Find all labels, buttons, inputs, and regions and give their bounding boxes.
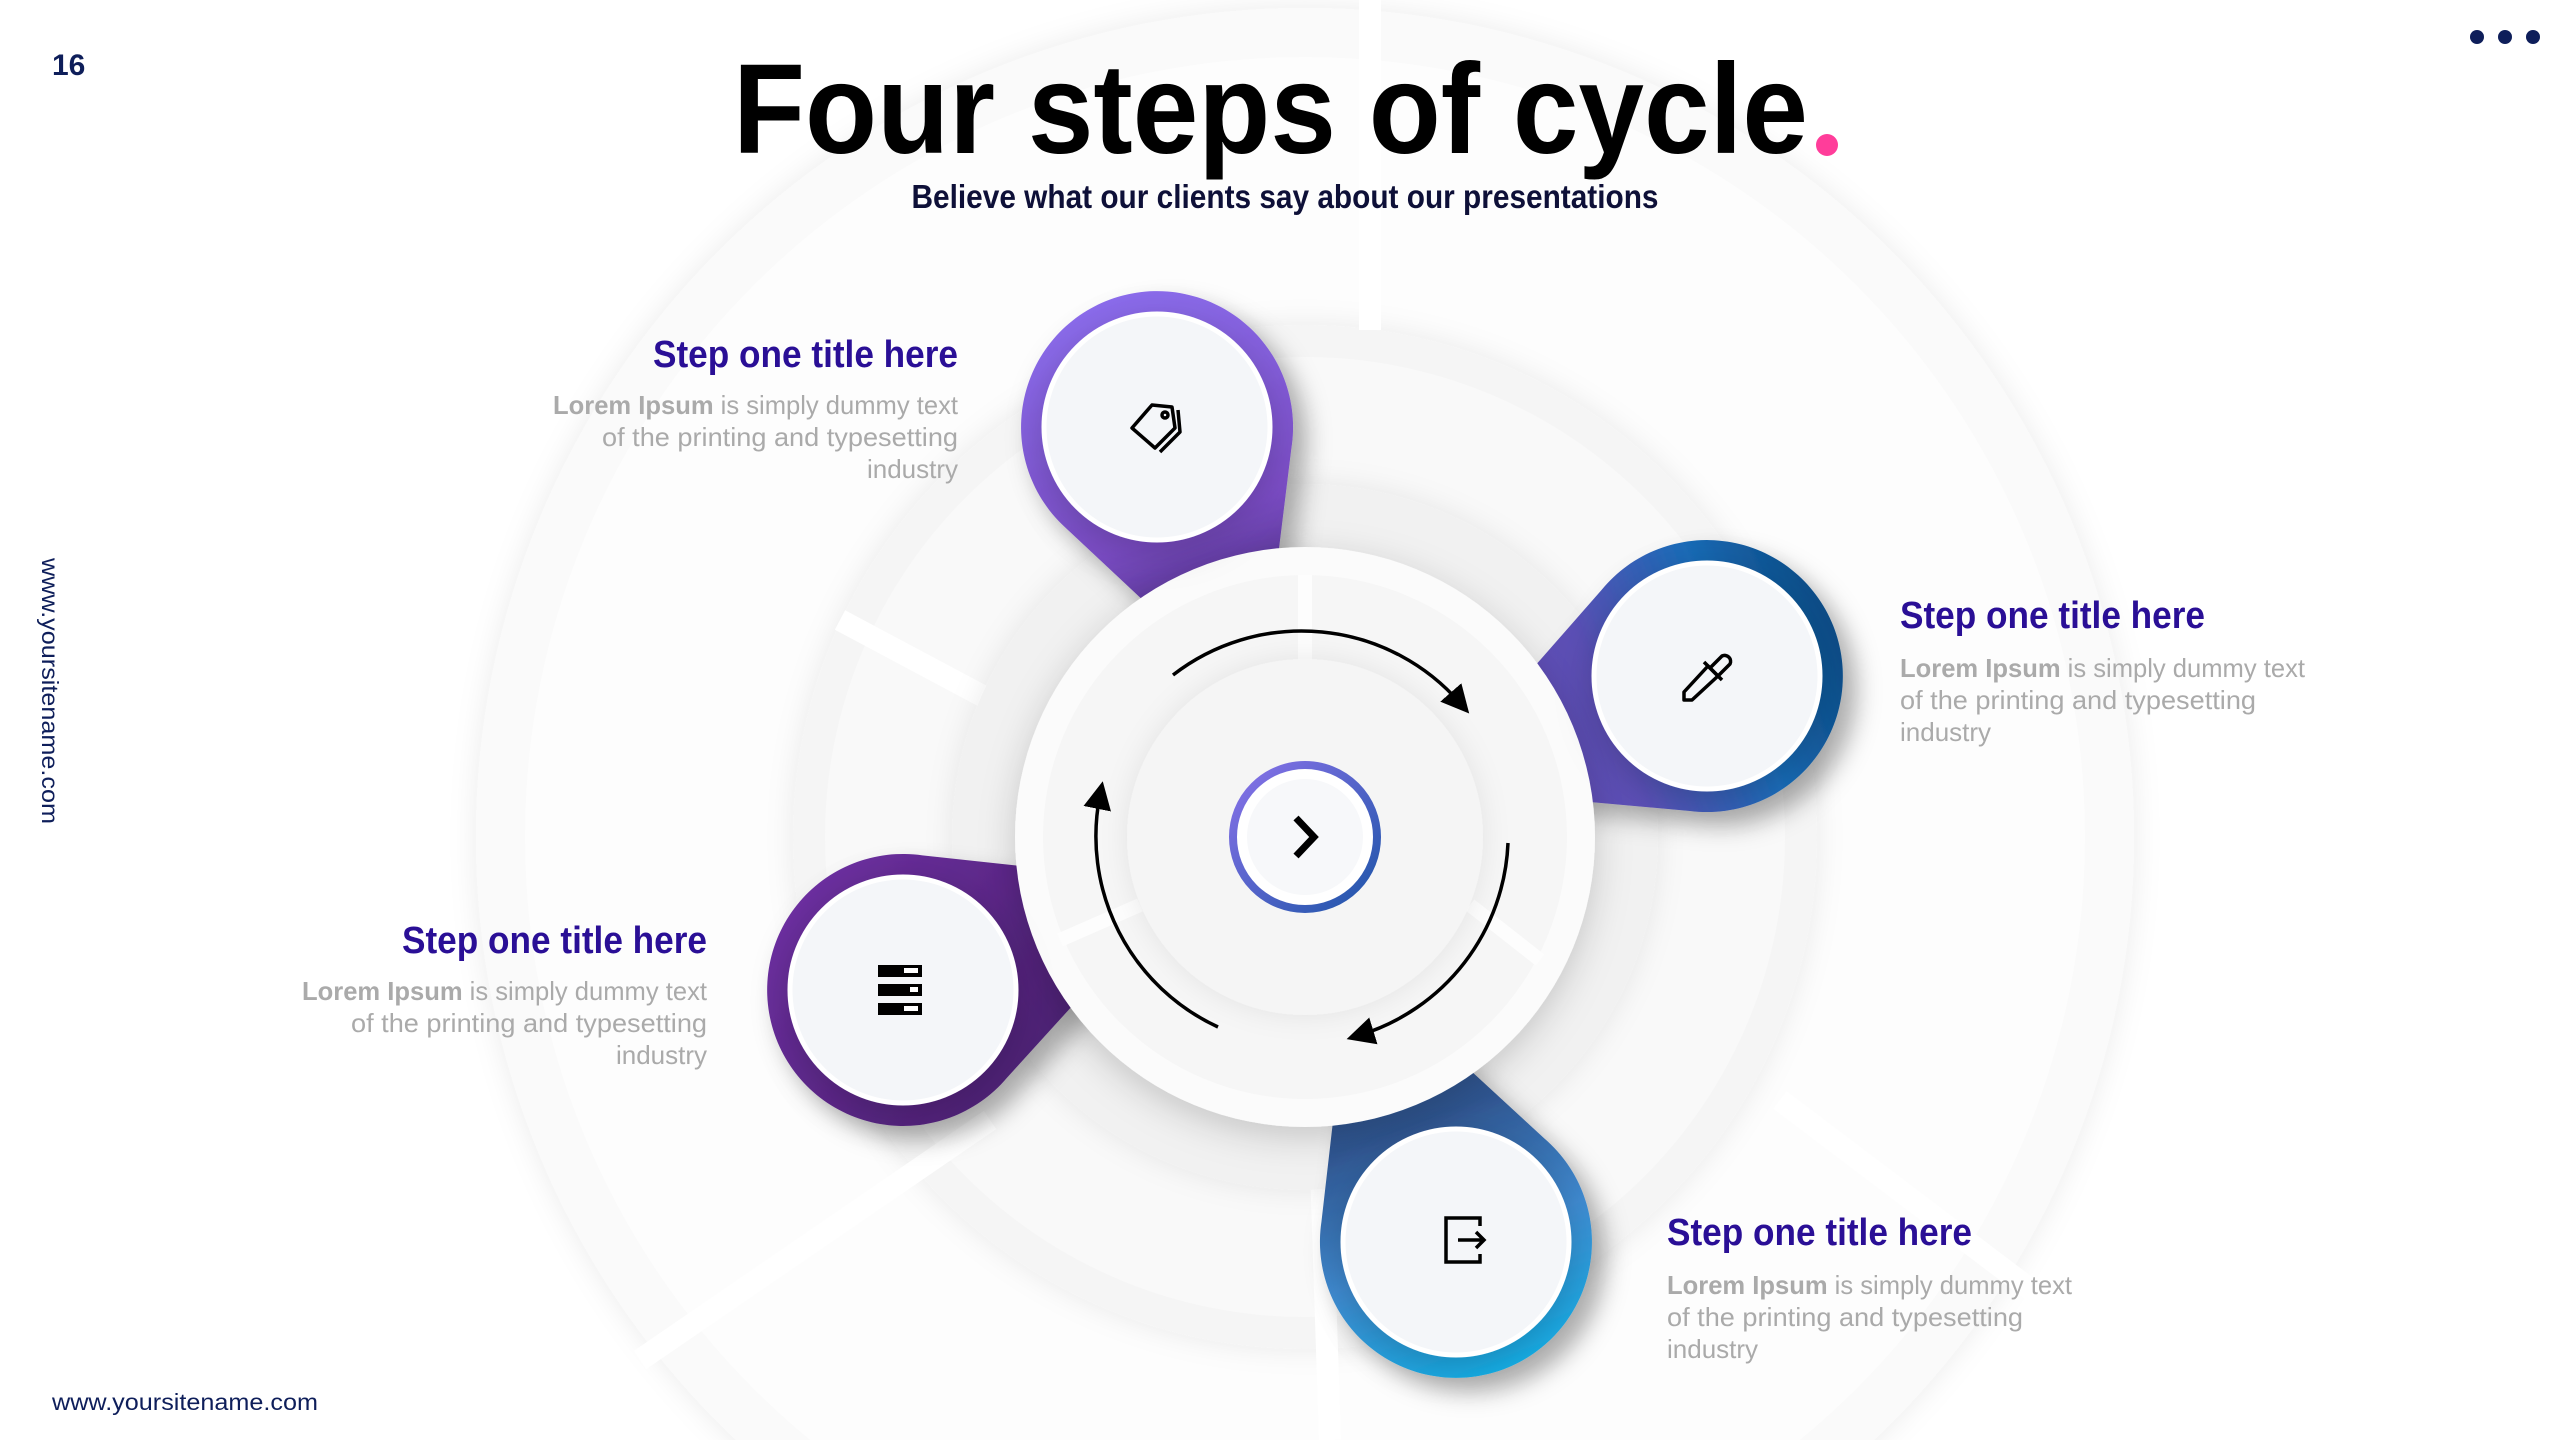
background concentric rings — [476, 0, 2150, 1440]
text block: top-left: of the printing and typesetting — [602, 422, 958, 452]
text block: top-left: Lorem Ipsum is simply dummy text — [553, 390, 959, 420]
title: Four steps of cycle — [733, 38, 1808, 181]
text block: bottom: Lorem Ipsum is simply dummy text — [1667, 1270, 2073, 1300]
text block: right: of the printing and typesetting — [1900, 685, 2256, 715]
text block: top-left: industry — [867, 454, 958, 484]
central disc — [1015, 547, 1595, 1127]
text block: right: Lorem Ipsum is simply dummy text — [1900, 653, 2306, 683]
step blob: right — [1378, 499, 1884, 914]
step circle: right with pipette icon — [1594, 563, 1820, 789]
text block: bottom: Step one title here — [1667, 1212, 1972, 1254]
text block: top-left — [553, 334, 959, 484]
page number: 16 — [52, 49, 85, 82]
text block: left: of the printing and typesetting — [351, 1008, 707, 1038]
subtitle: Believe what our clients say about our presentations — [912, 178, 1658, 215]
step blob: top-left — [983, 253, 1387, 755]
text block: bottom: industry — [1667, 1334, 1758, 1364]
text block: left: Lorem Ipsum is simply dummy text — [302, 976, 708, 1006]
vertical url: www.yoursitename.com — [37, 557, 63, 824]
text block: right: Step one title here — [1900, 595, 2205, 637]
footer url: www.yoursitename.com — [51, 1389, 318, 1415]
step circle: left with server icon — [790, 877, 1016, 1103]
text block: bottom — [1667, 1212, 2073, 1364]
text block: right: industry — [1900, 717, 1991, 747]
text block: right — [1900, 595, 2306, 747]
text block: bottom: of the printing and typesetting — [1667, 1302, 2023, 1332]
text block: left — [302, 920, 708, 1070]
text block: left: Step one title here — [402, 920, 707, 962]
step circle: top-left with tag icon — [1044, 314, 1270, 540]
menu dots — [2470, 30, 2540, 44]
center button — [1233, 765, 1377, 909]
step blob: bottom — [1224, 913, 1631, 1417]
text block: left: industry — [616, 1040, 707, 1070]
text block: top-left: Step one title here — [653, 334, 958, 376]
step blob: left — [728, 756, 1232, 1165]
cycle arrows — [1096, 631, 1508, 1035]
step circle: bottom with exit icon — [1343, 1129, 1569, 1355]
